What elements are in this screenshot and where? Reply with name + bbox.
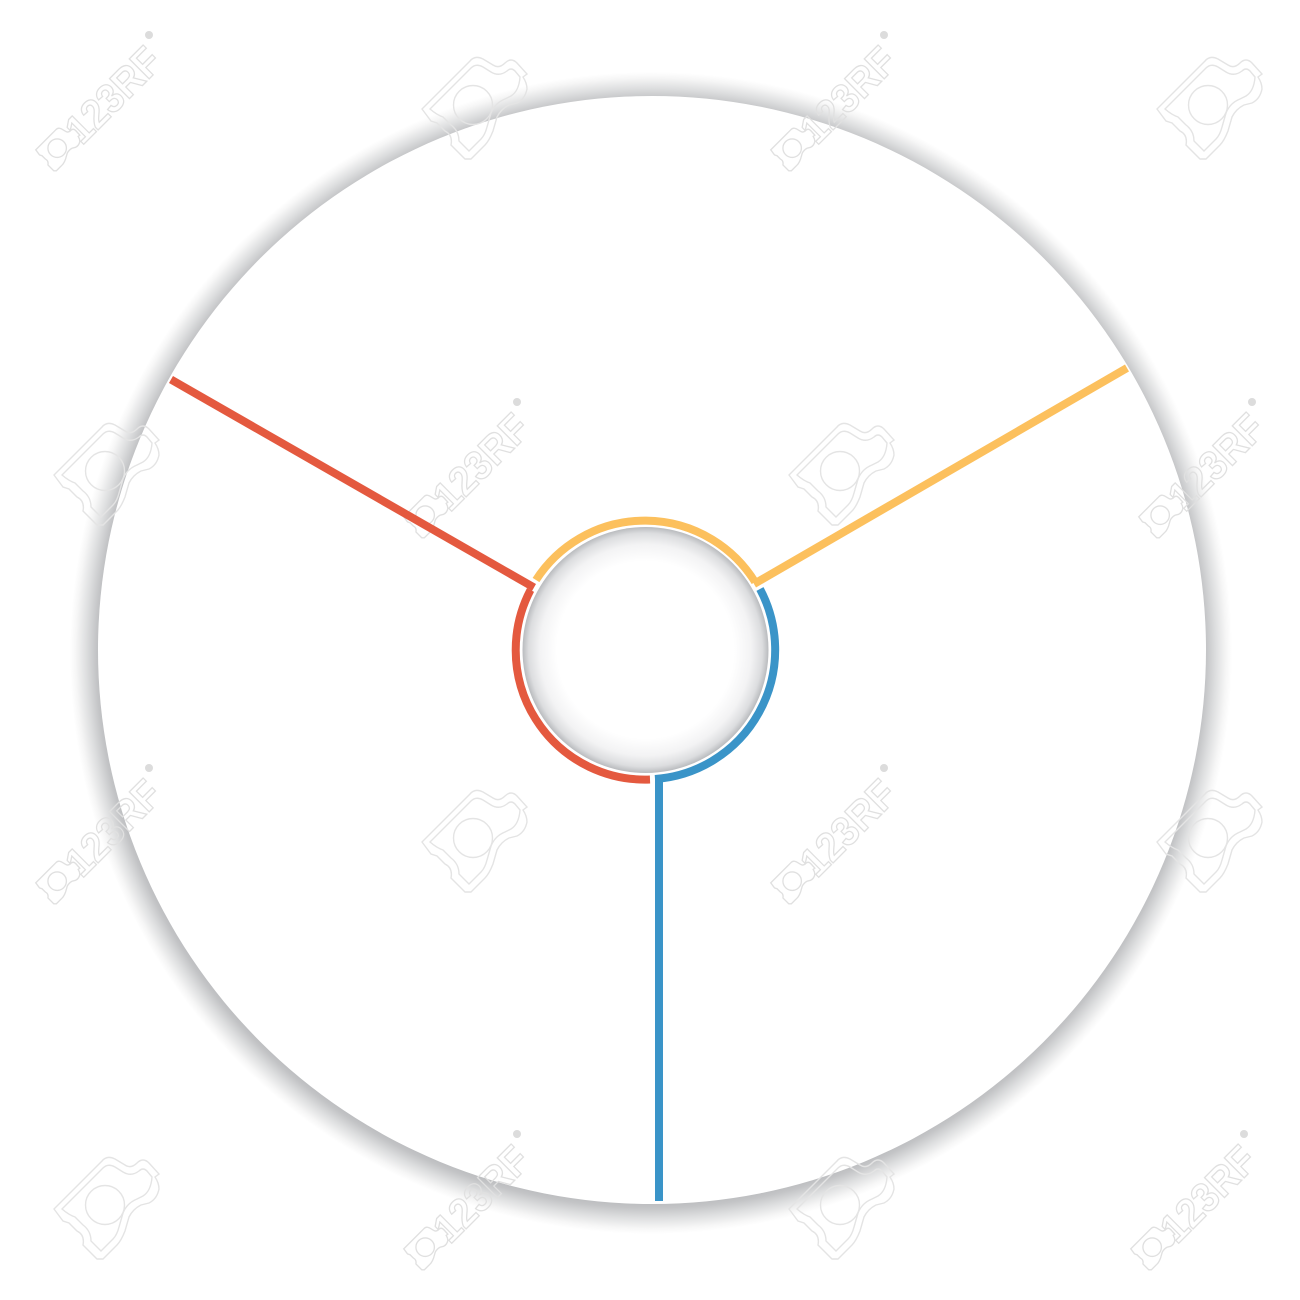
red arc bbox=[516, 590, 650, 780]
watermark emblem top bbox=[422, 57, 527, 159]
watermark emblem top-right bbox=[1157, 57, 1262, 159]
watermark stamp bottom-centre: 123RF bbox=[424, 1137, 538, 1251]
blue line bbox=[655, 775, 663, 1201]
watermark emblem lower-right bbox=[1157, 790, 1262, 892]
red line bbox=[171, 380, 534, 588]
main disc bbox=[98, 96, 1206, 1204]
watermark stamp centre-left: 123RF bbox=[424, 405, 538, 519]
centre hub bbox=[520, 525, 770, 775]
watermark emblem bottom-left bbox=[54, 1157, 159, 1259]
watermark stamp bottom-right: 123RF bbox=[1151, 1137, 1265, 1251]
spoke: red segment bbox=[171, 380, 650, 780]
watermark emblem left bbox=[54, 423, 159, 525]
watermark stamp top-centre: 123RF bbox=[791, 38, 905, 152]
watermark stamp top-left: 123RF bbox=[56, 38, 170, 152]
spoke: blue segment bbox=[655, 589, 775, 1201]
watermark stamp lower-centre-right: 123RF bbox=[791, 771, 905, 885]
watermark stamp mid-right: 123RF bbox=[1159, 405, 1273, 519]
yellow arc bbox=[536, 521, 755, 582]
watermark stamp lower-left: 123RF bbox=[56, 771, 170, 885]
watermark emblem bottom-centre bbox=[789, 1157, 894, 1259]
blue arc bbox=[655, 589, 775, 779]
yellow line bbox=[754, 368, 1127, 584]
spoke: yellow segment bbox=[536, 368, 1127, 584]
disc shadow bbox=[70, 72, 1232, 1234]
watermark emblem centre-right bbox=[789, 423, 894, 525]
watermark emblem lower-centre bbox=[422, 790, 527, 892]
